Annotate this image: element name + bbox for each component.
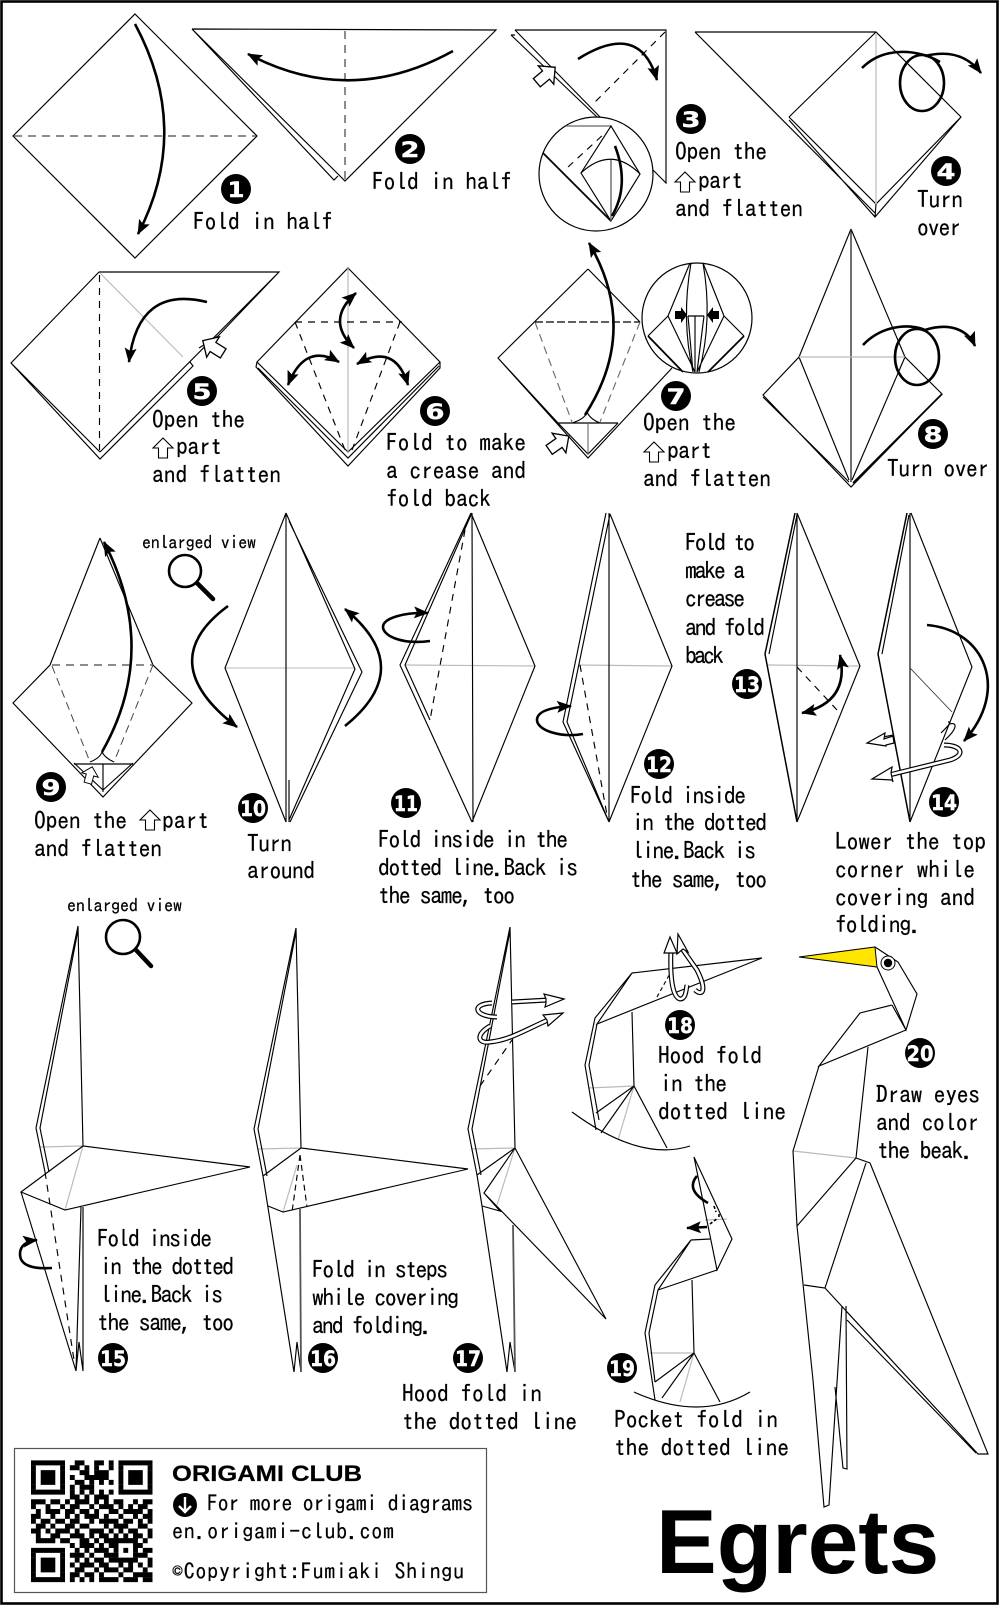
caption xyxy=(658,1043,786,1123)
caption xyxy=(917,187,963,239)
caption: in the dotted xyxy=(100,1254,234,1278)
badge 16: 16 xyxy=(310,1347,336,1371)
badge 20: 20 xyxy=(906,1042,934,1066)
diagram xyxy=(498,269,672,458)
caption: fold back xyxy=(386,486,491,510)
step 18 xyxy=(572,934,786,1150)
caption: Lower the top xyxy=(835,829,986,853)
badge 9 xyxy=(36,772,66,802)
caption: a crease and xyxy=(386,458,526,482)
brand name: ORIGAMI CLUB xyxy=(172,1461,362,1486)
diagram xyxy=(765,513,860,822)
caption: and folding. xyxy=(312,1313,433,1337)
magnifier: enlarged view xyxy=(67,897,182,966)
caption: Fold in steps xyxy=(312,1257,448,1281)
magnifier: enlarged view: enlarged view xyxy=(142,534,256,552)
step 14 xyxy=(835,513,988,936)
diagram xyxy=(695,32,961,217)
badge 3 xyxy=(676,104,706,134)
magnifier: enlarged view xyxy=(142,534,256,599)
diagram: folded triangle xyxy=(511,30,666,183)
caption: corner while xyxy=(835,857,975,881)
icon: hollow arrow xyxy=(529,58,563,92)
badge 4 xyxy=(931,156,961,186)
caption: part xyxy=(698,168,743,192)
icon: hollow arrow xyxy=(80,765,100,785)
step 7 xyxy=(498,243,771,490)
step 5 xyxy=(11,272,281,486)
arrow: double-headed crease xyxy=(802,655,842,713)
caption xyxy=(378,827,578,907)
arrow: pocket xyxy=(687,1227,707,1228)
link text: For more origami diagrams xyxy=(207,1492,473,1514)
caption: Turn xyxy=(247,831,292,855)
caption xyxy=(97,1226,234,1334)
caption: Hood fold in xyxy=(402,1381,542,1405)
diagram: finished egret xyxy=(793,947,988,1507)
step 9 xyxy=(13,538,209,860)
caption xyxy=(630,783,767,891)
caption: and flatten xyxy=(34,836,162,860)
footer panel xyxy=(14,1448,486,1592)
arrow: left crease xyxy=(288,356,339,385)
diagram xyxy=(763,229,942,487)
icon: down arrow xyxy=(173,1493,197,1517)
arrow: fold over xyxy=(129,299,207,362)
caption: Fold inside in the xyxy=(378,827,568,851)
caption: the same, too xyxy=(97,1310,234,1334)
icon: hollow arrow xyxy=(542,426,576,460)
badge 7: 7 xyxy=(666,385,686,409)
caption: the dotted line xyxy=(614,1435,789,1459)
diagram xyxy=(21,926,250,1371)
caption: Fold inside xyxy=(630,783,746,807)
caption: Open the xyxy=(34,808,127,832)
arrow: lift up xyxy=(102,542,132,752)
caption: the beak. xyxy=(877,1138,974,1162)
badge 2: 2 xyxy=(400,138,420,162)
arrow: turn over xyxy=(863,326,975,385)
caption: covering and xyxy=(835,885,975,909)
caption: Fold in half xyxy=(372,169,512,193)
title: Egrets xyxy=(656,1492,939,1593)
arrow: turn left xyxy=(192,606,237,727)
step 16 xyxy=(254,928,468,1373)
caption: line.Back is xyxy=(632,838,756,862)
caption: folding. xyxy=(835,912,922,936)
caption: Hood fold xyxy=(658,1043,762,1067)
caption: line.Back is xyxy=(100,1282,223,1306)
caption: part xyxy=(162,808,209,832)
caption xyxy=(34,808,209,860)
arrow: hollow upper xyxy=(867,722,955,746)
caption xyxy=(643,410,771,490)
caption xyxy=(386,430,526,510)
caption xyxy=(685,530,765,667)
step 10 xyxy=(192,513,381,882)
arrow: hood fold front xyxy=(664,937,687,999)
magnifier: enlarged view: enlarged view xyxy=(67,897,182,915)
badge 6 xyxy=(420,396,450,426)
diagram xyxy=(225,513,362,822)
QR code xyxy=(31,1463,152,1580)
step 20 xyxy=(793,947,988,1507)
badge 10: 10 xyxy=(240,797,266,821)
step 6 xyxy=(256,268,526,510)
caption: Turn over xyxy=(887,456,989,480)
caption: in the dotted xyxy=(632,810,767,834)
diagram xyxy=(563,513,672,822)
badge 4: 4 xyxy=(936,160,956,184)
arrow: inside fold xyxy=(383,613,430,642)
caption: and fold xyxy=(685,615,765,639)
badge 15: 15 xyxy=(100,1347,126,1371)
diagram xyxy=(13,538,192,797)
caption: Fold to make xyxy=(386,430,526,454)
detail circle xyxy=(642,263,752,373)
badge 19: 19 xyxy=(609,1357,635,1381)
diagram xyxy=(256,268,440,466)
step 12 xyxy=(537,513,767,891)
diagram xyxy=(400,513,535,822)
diagram xyxy=(11,272,279,459)
caption: Open the xyxy=(643,410,736,434)
badge 9: 9 xyxy=(42,776,60,800)
caption: around xyxy=(247,858,315,882)
arrow: turn right xyxy=(345,609,381,726)
caption: part xyxy=(176,434,222,458)
caption: the same, too xyxy=(378,883,515,907)
badge 17: 17 xyxy=(455,1347,481,1371)
step 11 xyxy=(378,513,578,907)
caption: Fold inside xyxy=(97,1226,212,1250)
caption xyxy=(675,139,803,220)
arrow: hood fold lower xyxy=(480,1013,563,1042)
caption: the dotted line xyxy=(402,1409,577,1433)
badge 5 xyxy=(187,376,217,406)
arrow: hollow lower xyxy=(872,745,960,782)
caption: Pocket fold in xyxy=(614,1407,778,1431)
caption: the same, too xyxy=(630,867,767,891)
caption xyxy=(402,1381,577,1433)
eye xyxy=(881,956,895,970)
arrow: curl xyxy=(693,1176,708,1203)
caption: and flatten xyxy=(152,462,281,486)
diagram xyxy=(468,927,606,1372)
badge 8 xyxy=(918,419,948,449)
diagram xyxy=(634,1157,750,1407)
badge 5: 5 xyxy=(192,380,212,404)
arrow: lift up xyxy=(585,243,614,415)
arrow: lower corner xyxy=(927,625,988,741)
arrow: fold down xyxy=(135,24,164,234)
badge 11 xyxy=(391,788,421,818)
caption xyxy=(152,407,281,486)
diagram xyxy=(572,958,762,1150)
caption xyxy=(835,829,986,936)
badge 8: 8 xyxy=(924,423,942,447)
diagram xyxy=(254,928,468,1372)
step 4 xyxy=(695,32,981,239)
icon: hollow arrow xyxy=(196,330,230,364)
caption: Open the xyxy=(152,407,245,431)
arrow: open pocket xyxy=(578,44,657,80)
step 19 xyxy=(607,1157,789,1459)
arrow: hood fold back xyxy=(677,934,703,993)
badge 6: 6 xyxy=(426,400,444,424)
copyright: ©Copyright:Fumiaki Shingu xyxy=(172,1560,464,1582)
badge 11: 11 xyxy=(394,792,418,816)
detail circle xyxy=(539,117,653,231)
caption: and color xyxy=(876,1110,979,1134)
caption: back xyxy=(685,643,724,667)
caption: dotted line.Back is xyxy=(378,855,578,879)
badge 18: 18 xyxy=(667,1014,693,1038)
arrow: inside fold xyxy=(537,706,583,735)
arrow: turn over xyxy=(862,52,981,111)
diagram: diamond with fold line xyxy=(13,14,257,258)
caption xyxy=(247,831,315,882)
step 17 xyxy=(402,927,606,1433)
caption: and flatten xyxy=(643,466,771,490)
arrow: fold left xyxy=(248,51,453,80)
caption xyxy=(312,1257,459,1337)
badge 1 xyxy=(221,174,251,204)
arrow: inside fold xyxy=(20,1240,52,1268)
caption: over xyxy=(917,215,961,239)
caption: while covering xyxy=(312,1285,459,1309)
step 8 xyxy=(763,229,989,487)
caption: Open the xyxy=(675,139,767,163)
arrow: right crease xyxy=(357,357,408,385)
caption: Draw eyes xyxy=(876,1082,980,1106)
badge 3: 3 xyxy=(682,108,700,132)
badge 13: 13 xyxy=(734,673,760,697)
caption: and flatten xyxy=(675,196,803,220)
caption: part xyxy=(667,438,712,462)
caption: Fold to xyxy=(685,530,755,554)
caption xyxy=(876,1082,980,1162)
caption: crease xyxy=(685,586,745,610)
step 2 xyxy=(192,29,512,193)
caption xyxy=(614,1407,789,1459)
caption: dotted line xyxy=(658,1099,786,1123)
arrow: hood fold upper xyxy=(478,994,564,1017)
badge 12: 12 xyxy=(646,753,672,777)
badge 14: 14 xyxy=(931,791,957,815)
step 13 xyxy=(685,513,860,822)
caption: in the xyxy=(660,1071,727,1095)
beak: yellow xyxy=(799,947,877,967)
diagram xyxy=(878,513,972,822)
caption: make a xyxy=(685,558,745,582)
diagram: triangle xyxy=(192,29,496,181)
badge 1: 1 xyxy=(228,178,244,202)
caption: Fold in half xyxy=(193,209,333,233)
step 15 xyxy=(20,926,250,1373)
badge 7 xyxy=(661,381,691,411)
badge 2 xyxy=(395,134,425,164)
url: en.origami-club.com xyxy=(172,1520,394,1542)
step 1 xyxy=(13,14,333,258)
caption: Turn xyxy=(917,187,963,211)
step 3 xyxy=(511,30,803,231)
arrow: top crease xyxy=(340,293,356,348)
